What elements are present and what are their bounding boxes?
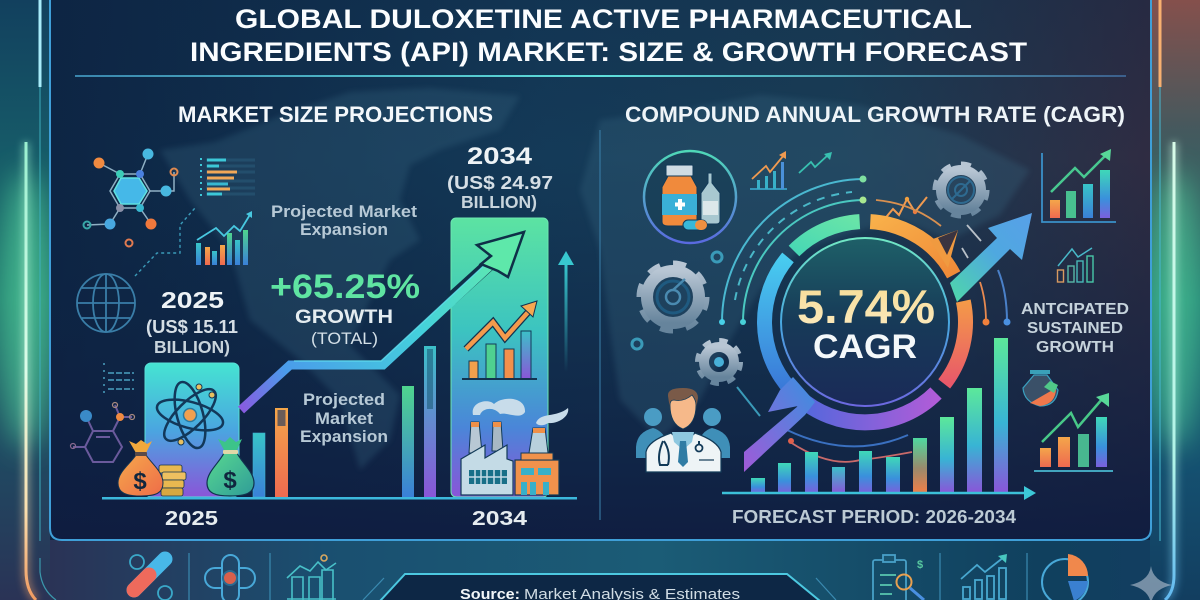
bottom icon: clover [205,555,255,600]
icon: flask [1023,370,1058,406]
icon: mini bar chart with arrow [196,211,252,265]
icon: green money bag: $ [223,467,237,494]
bottom icon: clipboard: $ [917,559,923,571]
icon: gear top [936,165,986,215]
icon: right chart top [1042,149,1116,222]
bottom dividers [189,553,1027,600]
icon: orange money bag and coins: $ [133,468,147,495]
up arrow beside bar [558,251,574,372]
label: 2025 value: (US$ 15.11 [146,316,238,337]
icon: molecule lower left [70,402,134,462]
outer arcs around ring [719,176,1010,462]
icon: gear lower [698,341,740,383]
icon: data list [201,158,255,196]
label: projected market expansion lower [300,391,388,446]
axis labels [165,507,528,530]
dashed connector [135,208,195,276]
icon: right chart lower [1034,393,1113,471]
icon: molecule top left [84,148,178,246]
icon: globe [77,274,135,332]
bottom bar chart [722,338,1036,500]
title: GLOBAL DULOXETINE ACTIVE PHARMACEUTICAL [235,4,972,34]
icon: green money bag [207,437,254,496]
axis labels: 2025 [165,507,218,530]
source tab [380,574,820,600]
label: projected market expansion lower: Projected [303,391,385,409]
icon: atom [154,379,226,451]
callout: total growth: GROWTH [295,307,393,328]
icon: orange zigzag [882,197,927,222]
up arrow from ring [950,213,1032,302]
label: 2034 value: BILLION) [461,192,537,212]
CAGR value: CAGR [813,328,917,366]
label: anticipated sustained growth: ANTCIPATED [1021,301,1129,318]
CAGR value: 5.74% [797,280,935,333]
baseline [102,497,577,500]
axis labels: 2034 [472,507,528,530]
label: projected market expansion lower: Expansion [300,428,388,446]
label: projected market expansion top [271,203,418,239]
label: 2025 value [146,287,238,357]
label: projected market expansion lower: Market [315,410,374,428]
icon: data notes [104,363,134,397]
bottom icon: house chart [287,555,336,600]
sparkle watermark [1130,566,1172,600]
world map background [160,88,1030,470]
bottom icon: pie chart [1042,554,1088,600]
bottom icon: capsule [130,555,172,600]
icons: tiny gears [632,252,722,349]
label: 2034 value: (US$ 24.97 [447,172,553,193]
bar: 2025 [145,363,239,497]
inner chart in 2034 bar [462,301,537,379]
bottom icon: trend chart [961,554,1007,599]
bar: 2034 [451,218,548,497]
small bars left [253,346,436,497]
CAGR ring [765,222,966,422]
label: 2034 value: 2034 [467,143,533,170]
callout: total growth [270,268,420,348]
label: projected market expansion top: Projected Market [271,203,418,221]
heading: CAGR: COMPOUND ANNUAL GROWTH RATE (CAGR) [625,102,1125,127]
icon: small trend chart [750,151,787,189]
icon: small trend line [799,152,832,173]
callout: total growth: +65.25% [270,268,420,306]
heading: market size projections: MARKET SIZE PROJECTIONS [178,102,493,127]
callout: total growth: (TOTAL) [311,329,378,348]
label: 2025 value: BILLION) [154,337,230,357]
label: 2034 value [447,143,553,212]
icon: right chart small [1058,248,1093,282]
magnifier tail arrow [744,377,815,472]
growth arrow [241,232,524,410]
icon: gear left [641,265,705,329]
icon: orange money bag and coins [118,440,186,496]
label: anticipated sustained growth [1021,301,1129,356]
header rule [75,75,1126,77]
label: anticipated sustained growth: GROWTH [1036,339,1114,356]
icon: medicine bottle badge [644,151,736,243]
label: forecast period: FORECAST PERIOD: 2026-2034 [732,506,1017,527]
panel divider [599,130,601,520]
label: anticipated sustained growth: SUSTAINED [1027,320,1123,337]
icon: factory [461,399,568,495]
title [190,4,1027,67]
label: 2025 value: 2025 [161,287,224,313]
label: projected market expansion top: Expansion [300,221,388,239]
CAGR value [797,280,935,366]
icon: doctor and team [636,388,730,472]
title: INGREDIENTS (API) MARKET: SIZE & GROWTH FORECAST [190,37,1027,67]
bottom icon: clipboard [873,555,924,600]
